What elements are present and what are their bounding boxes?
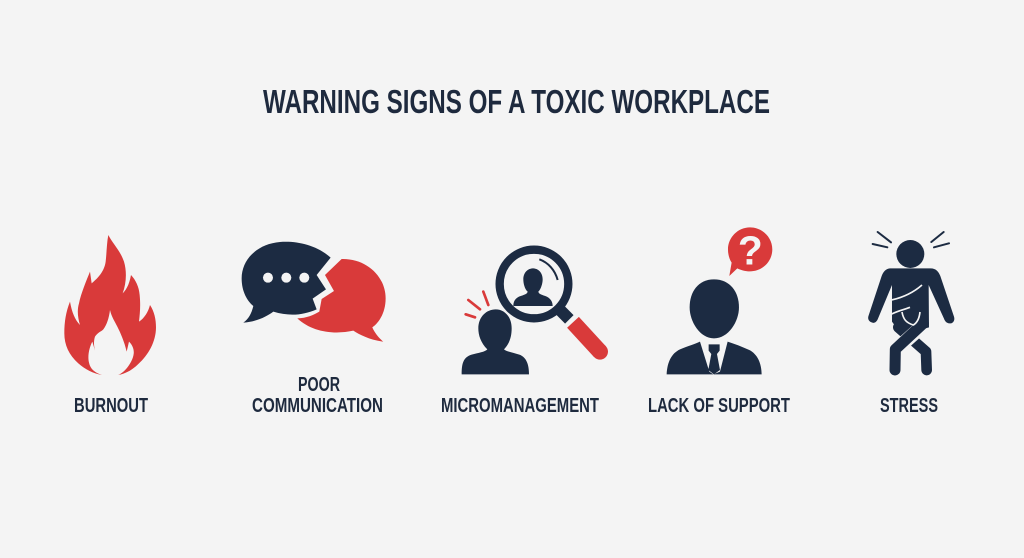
label: lack of support: LACK OF SUPPORT	[648, 395, 790, 417]
stress rays	[873, 232, 949, 247]
suit	[667, 342, 762, 374]
icon: person with question	[667, 227, 772, 374]
head	[896, 240, 924, 268]
magnifier lens	[500, 250, 568, 318]
tie	[708, 344, 720, 374]
label: poor communication	[252, 374, 383, 417]
icon: magnifier over person	[462, 250, 608, 374]
label: poor communication: COMMUNICATION	[252, 395, 383, 417]
magnifier handle	[561, 311, 569, 319]
panel: stress	[868, 232, 954, 417]
panel: lack of support	[648, 227, 790, 417]
panel: burnout	[64, 235, 156, 417]
lens glint	[539, 259, 558, 280]
stomach lines	[892, 285, 922, 325]
legs	[898, 327, 927, 370]
dark bubble	[242, 242, 331, 323]
watched person	[462, 309, 529, 374]
alarm ticks	[466, 292, 488, 317]
panel: poor communication	[242, 242, 386, 417]
torso and arms	[868, 268, 954, 335]
icon: inner flame	[88, 310, 134, 375]
label: micromanagement: MICROMANAGEMENT	[441, 395, 599, 417]
head	[690, 279, 739, 338]
person in lens	[513, 268, 553, 306]
label: poor communication: POOR	[298, 374, 340, 396]
icon: flame	[64, 235, 156, 375]
ellipsis dots	[263, 273, 309, 283]
question mark: ?	[738, 227, 763, 273]
question bubble	[728, 227, 772, 276]
panel: micromanagement	[441, 250, 608, 417]
title: WARNING SIGNS OF A TOXIC WORKPLACE	[263, 83, 770, 120]
icon: speech bubbles	[242, 242, 386, 342]
icon: stressed figure	[868, 232, 954, 370]
red bubble	[297, 259, 386, 342]
label: burnout: BURNOUT	[74, 395, 148, 417]
label: stress: STRESS	[880, 395, 938, 417]
